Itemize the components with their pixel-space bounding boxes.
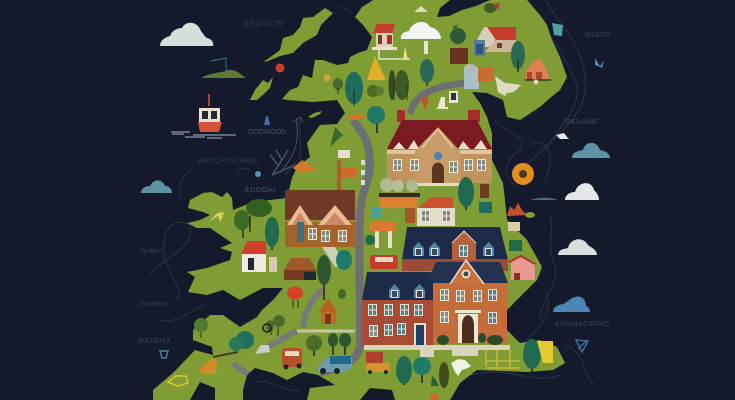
road end marker (346, 114, 367, 120)
cloud: north land (401, 22, 441, 39)
big house: red roof hall (387, 110, 492, 186)
south trees (396, 339, 541, 388)
monument number one (436, 97, 448, 109)
map label: west sea: GODWOOD (248, 129, 286, 136)
brown hut (284, 258, 316, 280)
yellow fence (486, 348, 520, 370)
main road (320, 120, 370, 372)
map label: north east: BANDOS (585, 32, 611, 39)
north east house (473, 27, 516, 56)
small teal swirl (525, 212, 535, 218)
walls (362, 300, 434, 346)
red pin on upper road (421, 97, 429, 110)
dormers (393, 140, 487, 149)
porch (458, 314, 478, 343)
road depot (464, 64, 493, 89)
teal boat shape (552, 23, 563, 36)
pink barn (509, 256, 535, 280)
map label: far west top: dunfinul (140, 248, 162, 255)
orange barn (525, 58, 551, 84)
orange flower (324, 74, 330, 82)
cloud: right white upper (565, 183, 599, 200)
white figure at north (424, 41, 428, 54)
red buoy (276, 64, 284, 72)
bare tree (270, 150, 295, 175)
black ring (263, 324, 271, 332)
waves (171, 132, 236, 138)
yellow green small structures (508, 222, 522, 251)
walls (402, 259, 508, 271)
hill islet with flag (201, 58, 246, 78)
cloud: top left (160, 23, 213, 46)
yellow boat left (199, 358, 217, 374)
red van delivery south (366, 352, 390, 374)
central gable (415, 127, 460, 185)
pump (480, 184, 489, 198)
entrance (432, 162, 444, 184)
roof (427, 262, 508, 283)
map label: north: BRIDNON (243, 19, 283, 28)
yellow sketch car (168, 376, 188, 386)
cloud: right white lower (558, 239, 597, 255)
map label: central sea: BADDHLEOHAL (198, 156, 258, 165)
cloud: right teal (572, 143, 610, 158)
white dog (451, 359, 471, 376)
top small tent (414, 6, 428, 12)
sea rivers and faint contour lines (150, 0, 595, 391)
walls (285, 222, 355, 247)
boat (171, 94, 236, 138)
upper road (410, 83, 467, 114)
brown van (282, 348, 302, 370)
small island (250, 77, 273, 100)
fallen branch (213, 352, 238, 357)
gables (287, 205, 352, 225)
gray bushes under hall (379, 178, 420, 197)
yellow horse (209, 212, 224, 222)
yellow obelisk (403, 46, 408, 60)
top red tag (493, 3, 500, 11)
yellow tent (367, 56, 386, 80)
orange central house (427, 260, 508, 344)
north peninsula island (263, 8, 333, 62)
map label: east: ENGLANVE (564, 117, 598, 126)
arrow (280, 117, 303, 172)
orange pavilion (370, 222, 395, 248)
map label: south east: ENGMACATHO (555, 321, 610, 328)
western trees (194, 199, 375, 356)
flame bushes (507, 203, 527, 216)
red sign shop (370, 255, 398, 269)
orange shed (319, 299, 338, 324)
walls (433, 283, 507, 344)
lower roads (233, 290, 355, 374)
bird (595, 58, 604, 68)
orange roofed row (372, 197, 455, 226)
orange ball south (430, 393, 438, 400)
pin (255, 171, 261, 177)
blue pond (530, 198, 558, 200)
walls (387, 150, 492, 183)
brown gabled house (285, 190, 355, 247)
cloud: right blue (553, 297, 590, 312)
small caravan (255, 345, 270, 354)
steps and path (322, 247, 345, 267)
yellow tower (537, 341, 553, 363)
gable (452, 231, 476, 260)
white red-roofed cottage (241, 241, 277, 272)
gable (450, 260, 484, 284)
teal sign (479, 202, 492, 213)
small west icon (160, 351, 168, 358)
red round sign (287, 286, 303, 308)
chimneys (397, 110, 480, 122)
north cottage (372, 24, 410, 59)
trees north (333, 3, 525, 133)
orange cars west of road (293, 127, 358, 190)
building base and shrubs (364, 333, 510, 357)
lighthouse icon (264, 116, 270, 125)
roof (402, 227, 508, 260)
roof (285, 190, 355, 220)
leaf small (452, 24, 458, 32)
white bird (556, 133, 569, 139)
map label: far west bottom: BOUNCHOL (138, 338, 172, 345)
roof (387, 120, 492, 149)
sun wheel (512, 163, 534, 185)
main land mass (153, 0, 567, 400)
star icon (576, 340, 588, 352)
cloud: left teal (141, 180, 172, 193)
white animal (495, 76, 521, 96)
small white building near road (449, 91, 458, 103)
map label: far west middle: moothern (140, 301, 167, 308)
road markers (361, 160, 365, 185)
left brick house (362, 272, 434, 347)
navy roof upper house (402, 227, 508, 271)
roof (362, 272, 433, 300)
small island in bay (308, 111, 322, 118)
map label: small: EDDOAL (245, 187, 277, 194)
blue van (317, 356, 352, 374)
tree beside hall (458, 177, 474, 210)
